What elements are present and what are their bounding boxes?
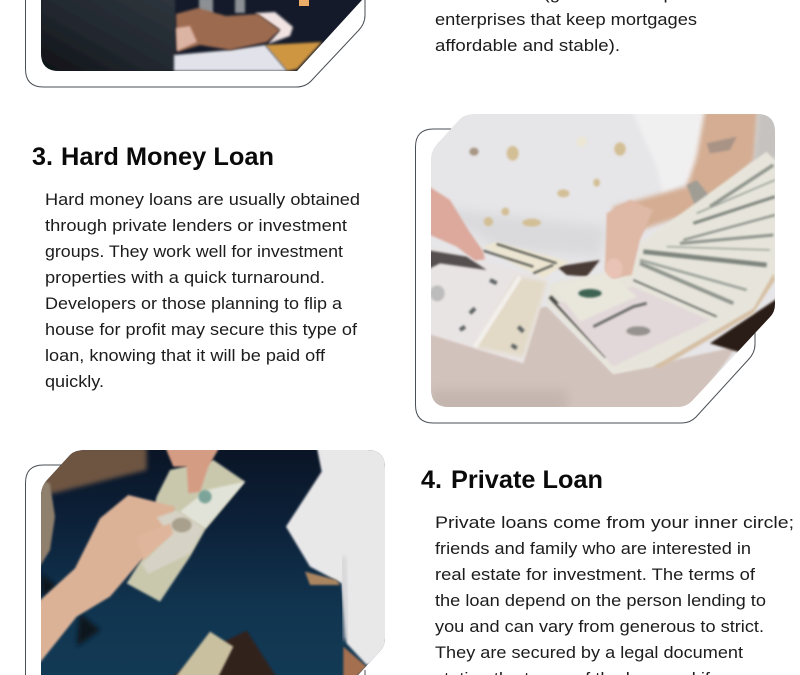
text: private loan description: you and can vary from generous to strict.	[435, 617, 764, 636]
table	[265, 42, 322, 71]
left hand	[427, 185, 485, 261]
background top	[636, 114, 702, 190]
hand and forearm	[37, 495, 175, 667]
text: hard money loan description: Developers or those planning to flip a	[45, 294, 343, 313]
fan bottom pink bill	[557, 287, 710, 367]
photo: hands fanning out dollar bills	[431, 114, 775, 407]
watch	[686, 180, 708, 204]
text: hard money loan description: through private lenders or investment	[45, 216, 347, 235]
text: hard money loan description: quickly.	[45, 372, 104, 391]
table	[431, 306, 734, 407]
bill portrait	[142, 511, 204, 574]
text: hard money loan description: Hard money loans are usually obtained	[45, 190, 360, 209]
lower arm	[343, 647, 367, 675]
text: private loan description: friends and family who are interested in	[435, 539, 751, 558]
text: card 2 description ending	[435, 0, 741, 55]
hand	[176, 8, 280, 52]
left grey strip	[41, 481, 56, 568]
heading: 4. Private Loan: Private Loan	[451, 466, 603, 494]
text: card 2 description ending: affordable and stable).	[435, 36, 620, 55]
photo: business people signing a document	[41, 0, 362, 71]
wallet	[168, 631, 278, 675]
frame: hard money image outline	[416, 129, 755, 423]
text: hard money loan description: house for profit may secure this type of	[45, 320, 357, 339]
shirt strips	[199, 0, 245, 14]
gold dots	[469, 137, 626, 227]
brown backdrop	[37, 447, 147, 493]
dark limb shadow	[41, 573, 100, 647]
text on paper	[186, 68, 268, 70]
right hand	[605, 200, 653, 278]
bill fan	[547, 152, 780, 374]
top fingers	[165, 447, 220, 493]
tie	[299, 0, 309, 6]
paper	[174, 45, 287, 71]
text: private loan description	[435, 513, 794, 675]
text: private loan description: the loan depend on the person lending to	[435, 591, 766, 610]
arm	[613, 110, 758, 240]
frame: private loan image outline	[26, 465, 365, 675]
photo: handing cash over with a wallet	[37, 447, 393, 675]
jacket	[41, 0, 176, 71]
wallet bills	[173, 632, 233, 675]
dark shadow	[710, 297, 780, 353]
heading: 3. Hard Money Loan: 3.	[32, 143, 53, 171]
text: private loan description: real estate for investment. The terms of	[435, 565, 755, 584]
text: hard money loan description: groups. They work well for investment	[45, 242, 343, 261]
small bills	[483, 242, 568, 278]
bills	[127, 460, 245, 602]
white shirt	[286, 447, 393, 665]
text: card 2 description ending: enterprises that keep mortgages	[435, 10, 697, 29]
left bills	[431, 308, 540, 364]
heading: 3. Hard Money Loan: Hard Money Loan	[61, 143, 274, 171]
text: hard money loan description: properties with a quick turnaround.	[45, 268, 325, 287]
text: private loan description: They are secured by a legal document	[435, 643, 743, 662]
text: private loan description: Private loans come from your inner circle;	[435, 513, 794, 532]
cuff	[255, 12, 293, 44]
frame: card 2 image outline	[26, 0, 365, 87]
heading: 4. Private Loan: 4.	[421, 466, 442, 494]
tattoo	[707, 137, 737, 153]
text: hard money loan description	[45, 190, 360, 391]
hand spot	[305, 572, 340, 585]
text: hard money loan description: loan, knowing that it will be paid off	[45, 346, 325, 365]
